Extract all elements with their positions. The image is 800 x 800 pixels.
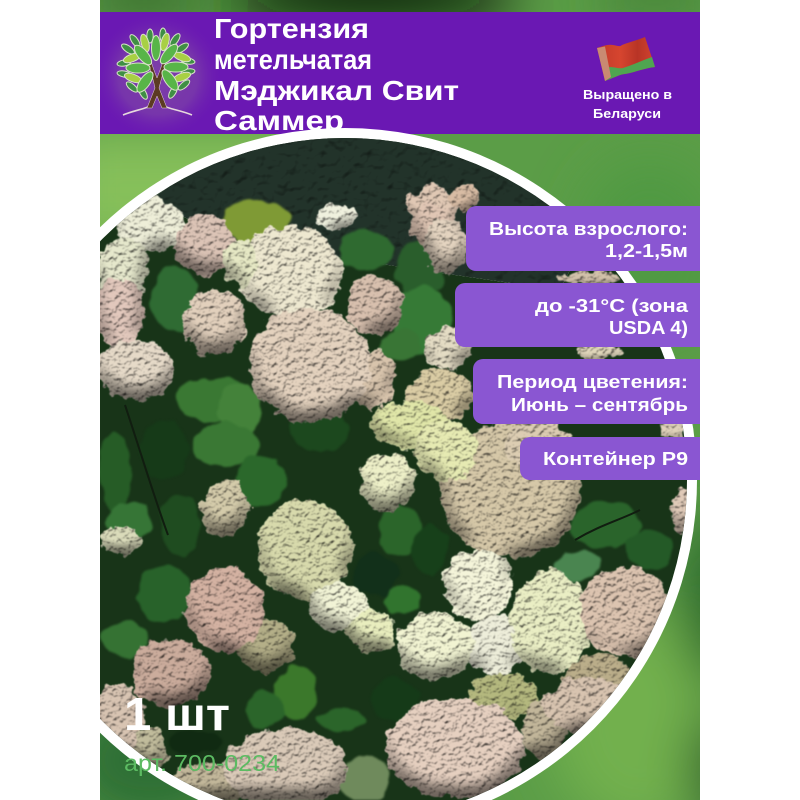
info pill: height: 1,2-1,5м <box>605 241 688 261</box>
info pill: height <box>466 206 700 271</box>
header band <box>92 12 700 140</box>
info pill: container <box>520 437 700 480</box>
title: Мэджикал Свит <box>214 75 459 106</box>
info pill: hardiness <box>455 283 700 347</box>
title: Саммер <box>214 105 344 136</box>
title: Гортензия <box>214 13 369 44</box>
info pill: flowering period: Период цветения: <box>497 372 688 392</box>
green blurred background <box>100 0 700 800</box>
logo: tree <box>117 28 195 115</box>
title: метельчатая <box>214 44 372 75</box>
article number: арт. 700-0234 <box>124 750 280 776</box>
info pill: hardiness: до -31°C (зона <box>535 296 689 316</box>
info pill: height: Высота взрослого: <box>489 219 688 239</box>
info pill: flowering period: Июнь – сентябрь <box>511 395 688 415</box>
branches <box>125 405 640 540</box>
photo of hydrangea bush <box>100 138 687 800</box>
info pill: hardiness: USDA 4) <box>609 318 688 338</box>
title <box>214 13 459 136</box>
quantity label: 1 шт <box>124 688 230 740</box>
hydrangea blossoms <box>92 184 692 800</box>
info pill: container: Контейнер Р9 <box>543 449 688 469</box>
foliage <box>99 200 674 800</box>
dark hedge <box>156 138 570 283</box>
text: grown in Belarus <box>583 87 672 121</box>
text: grown in Belarus: Беларуси <box>593 106 661 121</box>
info pill: flowering period <box>473 359 700 424</box>
text: grown in Belarus: Выращено в <box>583 87 672 102</box>
circular plant photo <box>100 128 697 800</box>
white circle frame <box>100 128 697 800</box>
icon: Belarus flag <box>597 37 655 81</box>
